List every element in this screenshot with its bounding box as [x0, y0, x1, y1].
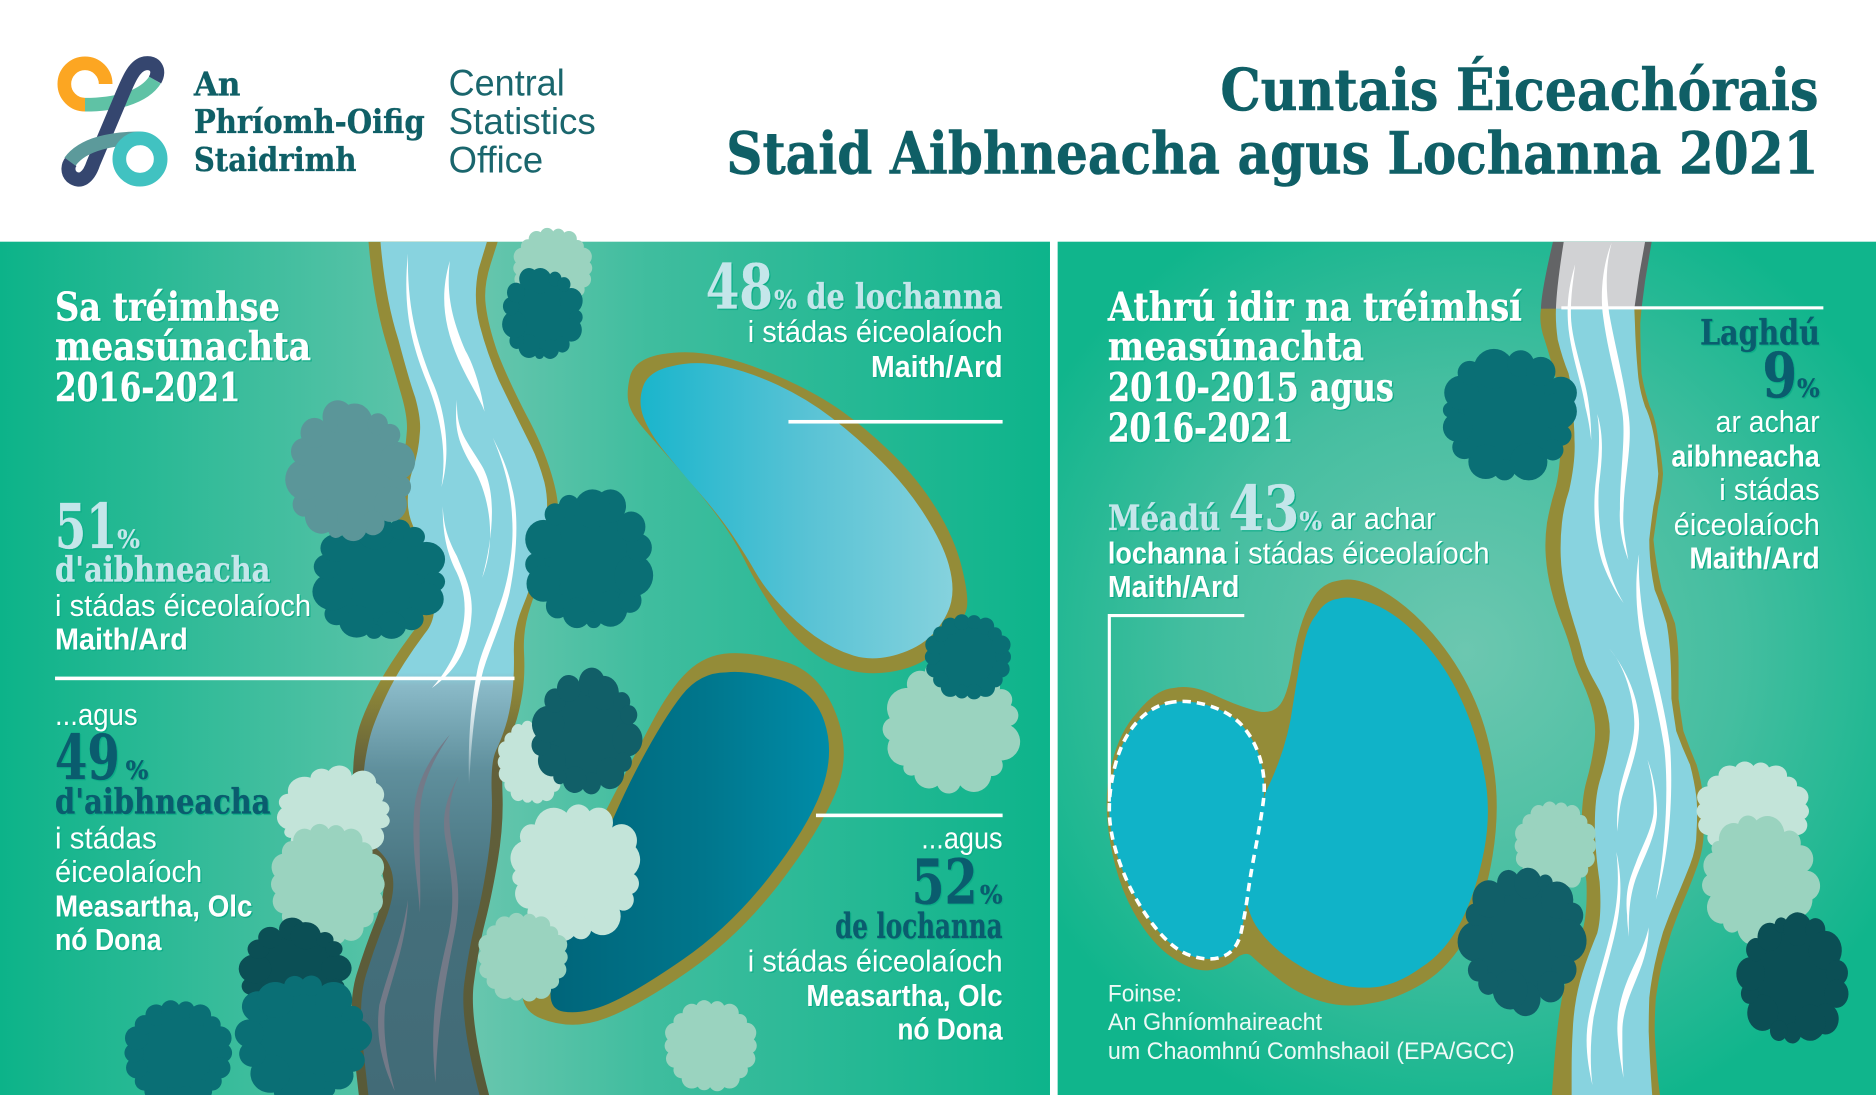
tree: lightest right — [1697, 762, 1809, 861]
stat: 52% lakes poor: 52 — [912, 845, 977, 918]
source note: um Chaomhnú Comhshaoil (EPA/GCC) — [1108, 1038, 1515, 1065]
logo: teal ring — [119, 138, 161, 180]
stat: 52% lakes poor — [748, 821, 1003, 1047]
stat: 9% decrease rivers: % — [1797, 373, 1820, 403]
tree: lightest mid — [498, 721, 567, 804]
stat: 49% rivers poor — [55, 698, 270, 957]
heading left: measúnachta — [55, 324, 311, 370]
source note: Foinse: — [1108, 980, 1182, 1007]
title — [726, 56, 1819, 187]
stat: 48% lakes good: i stádas éiceolaíoch — [748, 315, 1003, 349]
river grey streaks — [378, 735, 458, 1091]
panel: left, assessment period 2016-2021 — [0, 228, 1050, 1095]
trees right panel — [1443, 349, 1864, 1063]
panel background right — [1058, 242, 1876, 1095]
panel: right, change between periods — [1058, 242, 1876, 1095]
stat: 9% decrease rivers: Maith/Ard — [1689, 541, 1820, 575]
tree: pale top — [513, 228, 592, 308]
source note: An Ghníomhaireacht — [1108, 1009, 1322, 1036]
heading left: 2016-2021 — [55, 365, 240, 411]
upper lake, good status — [628, 352, 967, 673]
stat: 9% decrease rivers: éiceolaíoch — [1674, 508, 1820, 542]
stat: 43% increase lakes: 43 — [1229, 472, 1299, 545]
logo: navy loop — [68, 63, 157, 180]
river white streaks — [406, 254, 516, 784]
river left panel — [351, 242, 558, 1095]
tree: dark right — [925, 614, 1011, 699]
stat: 52% lakes poor: nó Dona — [897, 1013, 1003, 1047]
heading left — [55, 285, 311, 411]
tree: dark by heading — [1443, 349, 1577, 480]
logo: green ribbon — [85, 80, 155, 105]
stat: 9% decrease rivers: 9 — [1762, 339, 1797, 412]
river right panel — [1540, 242, 1704, 1095]
tree: pale by river — [1515, 802, 1596, 890]
tree: pale left — [271, 824, 385, 944]
stat: 49% rivers poor: ...agus — [55, 698, 138, 732]
stat: 9% decrease rivers: i stádas — [1719, 473, 1820, 507]
heading right: measúnachta — [1108, 324, 1364, 370]
stat: 49% rivers poor: nó Dona — [55, 923, 162, 957]
stat: 52% lakes poor: de lochanna — [835, 906, 1003, 947]
stat: 49% rivers poor: d'aibhneacha — [55, 782, 270, 823]
divider line right — [1561, 306, 1823, 309]
heading right — [1107, 285, 1522, 451]
stat: 52% lakes poor: Measartha, Olc — [806, 979, 1003, 1013]
stat: 51% rivers good: d'aibhneacha — [55, 549, 270, 590]
stat: 48% lakes good — [706, 251, 1003, 384]
stat: 48% lakes good: de lochanna — [806, 277, 1003, 318]
tree: pale right — [859, 632, 1047, 819]
lower lake, poor status — [522, 653, 844, 1025]
stat: 51% rivers good: Maith/Ard — [55, 623, 188, 657]
tree: dark mid — [514, 649, 660, 816]
stat: 48% lakes good: 48 — [706, 251, 773, 324]
stat: 49% rivers poor: 49 — [55, 721, 120, 794]
heading right: Athrú idir na tréimhsí — [1107, 285, 1522, 331]
stat: 43% increase lakes: Maith/Ard — [1108, 570, 1240, 604]
tree: dark by lake — [1443, 849, 1602, 1031]
stat: 43% increase lakes: Méadú — [1108, 498, 1220, 539]
logo text: Irish: Phríomh-Oifig — [194, 102, 425, 141]
stat: 43% increase lakes: i stádas éiceolaíoch — [1234, 537, 1490, 571]
stat: 49% rivers poor: i stádas — [55, 821, 157, 855]
logo: orange arc — [64, 63, 106, 105]
stat: 43% increase lakes: ar achar — [1330, 502, 1436, 536]
tree: darkest left — [226, 907, 364, 1031]
logo text: English: Statistics — [449, 100, 596, 142]
tree: lightest left — [260, 749, 411, 879]
stat: 43% increase lakes: lochanna — [1108, 537, 1227, 571]
tree: dark top — [502, 268, 583, 359]
stat: 9% decrease rivers — [1671, 313, 1821, 575]
stat: 49% rivers poor: % — [126, 755, 148, 785]
stat: 9% decrease rivers: Laghdú — [1700, 313, 1820, 354]
stat: 51% rivers good: i stádas éiceolaíoch — [55, 589, 311, 623]
tree: teal under grey — [312, 514, 445, 639]
heading right: 2010-2015 agus — [1108, 365, 1394, 411]
source note — [1108, 980, 1515, 1065]
tree: pale right — [1682, 795, 1837, 965]
stat: 52% lakes poor: % — [980, 879, 1003, 909]
river white streaks right — [1568, 243, 1671, 1085]
stat: 51% rivers good: 51 — [55, 490, 117, 563]
divider lines left panel — [55, 420, 1003, 817]
logo text: English — [449, 62, 596, 180]
tree: lightest lake — [502, 793, 652, 950]
stat: 52% lakes poor: i stádas éiceolaíoch — [748, 945, 1003, 979]
stat: 43% increase lakes: % — [1299, 506, 1322, 536]
stat: 48% lakes good: % — [774, 285, 797, 315]
stat: 51% rivers good: % — [117, 524, 140, 554]
stat: 43% increase lakes — [1108, 472, 1490, 604]
tree: teal bottom — [212, 951, 392, 1095]
logo text: English: Central — [449, 62, 565, 104]
logo text: Irish — [193, 65, 425, 179]
stat: 48% lakes good: Maith/Ard — [871, 350, 1003, 384]
stat: 52% lakes poor: ...agus — [921, 821, 1003, 855]
panel background left — [0, 242, 1050, 1095]
tree: grey — [277, 393, 423, 550]
stat: 51% rivers good — [55, 490, 311, 657]
callout bracket — [1109, 616, 1244, 802]
heading right: 2016-2021 — [1108, 405, 1293, 451]
logo text: Irish: An — [193, 65, 241, 104]
heading left: Sa tréimhse — [55, 285, 280, 331]
tree: darkest right — [1724, 898, 1864, 1063]
logo: grey-green ribbon — [70, 138, 140, 162]
tree: dark beside river — [525, 489, 653, 628]
logo text: English: Office — [449, 138, 543, 180]
trees left panel — [124, 228, 1047, 1095]
stat: 49% rivers poor: éiceolaíoch — [55, 855, 202, 889]
stat: 9% decrease rivers: aibhneacha — [1671, 440, 1821, 474]
tree: pale lake — [478, 913, 568, 1001]
tree: pale bottom — [665, 1000, 757, 1091]
stat: 49% rivers poor: Measartha, Olc — [55, 889, 252, 923]
logo text: Irish: Staidrimh — [194, 140, 357, 179]
stat: 9% decrease rivers: ar achar — [1716, 405, 1820, 439]
lake with dashed former extent — [1107, 579, 1497, 1006]
tree: teal bottom left — [124, 1000, 232, 1095]
logo — [64, 63, 161, 180]
